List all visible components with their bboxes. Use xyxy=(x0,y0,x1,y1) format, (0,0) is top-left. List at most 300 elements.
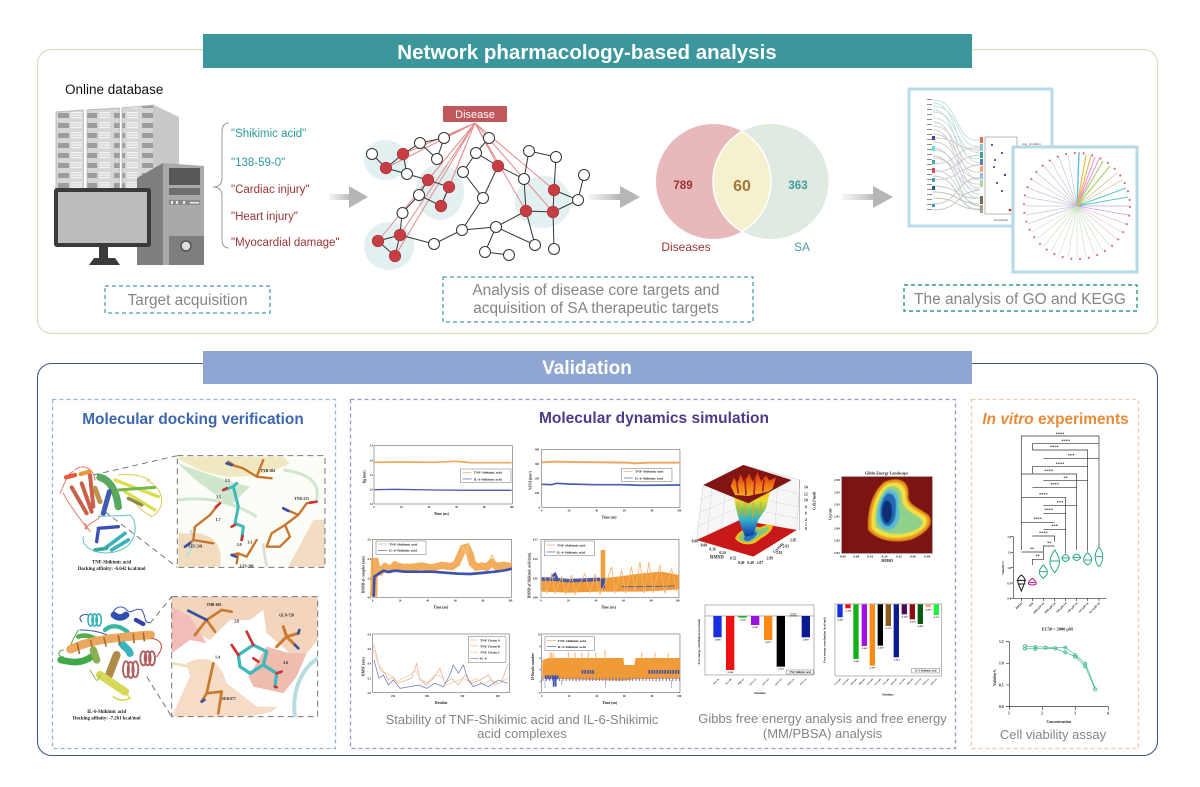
chart: viability violin plot with significance brackets: **** xyxy=(1050,482,1059,487)
chart: IL-6 free energy bars: -0.405 xyxy=(837,618,844,621)
inset: TNF docking close-up: TYR-304 xyxy=(261,469,275,473)
chart: viability violin plot with significance brackets: ** xyxy=(1047,541,1051,546)
chart: RMSD of Shikimic acid: 80 xyxy=(650,599,653,602)
heading: molecular docking: Molecular docking verification xyxy=(82,411,304,428)
caption: Gibbs and MM/PBSA xyxy=(698,711,947,741)
chart: RMSD of complex: RMSD of complex (nm) xyxy=(361,555,365,593)
chart: RMSD of complex: TNF-Shikimic acid xyxy=(389,542,417,546)
chart: RMSF by residue: 400 xyxy=(496,695,500,698)
chart: SASA over time: 0 xyxy=(541,509,543,512)
chart: viability violin plot with significance brackets: 500 μM SA xyxy=(1055,601,1068,614)
chart: Rg over time xyxy=(362,445,514,516)
chart: 3D Gibbs free energy surface: 2.91 xyxy=(776,551,783,555)
chart: cell viability dose curve: 3 xyxy=(1074,711,1076,715)
label: disease: Disease xyxy=(455,109,495,121)
chart: TNF free energy bars: GLY-123 xyxy=(774,677,783,686)
chart: Rg over time: Time (ns) xyxy=(434,512,450,516)
caption: IL-6 docking affinity xyxy=(73,710,141,721)
chart: 3D Gibbs free energy surface: Gyrate xyxy=(772,541,785,554)
chart: RMSF by residue: RMSF (nm) xyxy=(361,657,365,676)
chart: IL-6 free energy bars: ARG-722 xyxy=(930,678,938,686)
chart: IL-6 free energy bars: GLY-600 xyxy=(834,679,842,686)
chart: RMSF by residue: TNF Chain C xyxy=(480,651,501,655)
chart: 3D Gibbs free energy surface: 2.95 xyxy=(790,539,797,543)
chart: 3D Gibbs free energy surface: 10 xyxy=(804,499,808,503)
chart: RMSD of complex: 20 xyxy=(399,599,402,602)
chart: Gibbs energy landscape: Gyrate xyxy=(828,508,833,520)
chart: 3D Gibbs free energy surface: RMSD xyxy=(710,556,724,561)
chart: RMSF by residue: IL-6 xyxy=(480,657,487,661)
chart: RMSF by residue: 250 xyxy=(391,695,396,698)
chart: viability violin plot with significance brackets xyxy=(1001,431,1107,631)
chart: H-bonds number: 6 xyxy=(539,657,541,660)
chart: 3D Gibbs free energy surface: 4 xyxy=(805,518,807,522)
chart: Rg over time: TNF-Shikimic acid xyxy=(474,471,502,475)
inset: TNF docking close-up: TYR-233 xyxy=(294,497,309,501)
chart: viability violin plot with significance brackets: ** xyxy=(1063,475,1068,480)
chart: IL-6 free energy bars xyxy=(822,604,942,696)
chart: 3D Gibbs free energy surface: 2.93 xyxy=(783,544,789,548)
chart: H-bonds number: 0 xyxy=(541,695,543,698)
chart: viability violin plot with significance brackets: *** xyxy=(1051,524,1058,529)
chart: IL-6 free energy bars: ASN-679 xyxy=(906,678,914,686)
chart: SASA over time: 20 xyxy=(568,509,571,512)
network diagram xyxy=(364,106,590,270)
chart: SASA over time: Time (ns) xyxy=(602,515,617,519)
chart: TNF free energy bars: -2.167 xyxy=(777,668,785,671)
chart: IL-6 free energy bars: SER-602 xyxy=(851,679,858,686)
chart: RMSD of complex xyxy=(361,539,513,610)
chart: viability violin plot with significance brackets: 0.5 xyxy=(1007,581,1012,585)
chart: viability violin plot with significance brackets: 1.0 xyxy=(1007,566,1012,570)
chart: cell viability dose curve: 2 xyxy=(1041,711,1043,715)
chart: viability violin plot with significance brackets: 62.5 μM SA xyxy=(1088,601,1102,614)
heading: network pharmacology-based analysis xyxy=(203,34,972,68)
chart: cell viability dose curve: 1.5 xyxy=(999,640,1004,644)
chart: TNF free energy bars: -0.367 xyxy=(752,626,759,629)
search terms list xyxy=(231,128,340,249)
chart: RMSF by residue: 300 xyxy=(425,695,430,698)
heading: molecular dynamics: Molecular dynamics simulation xyxy=(539,410,769,427)
chart: TNF free energy bars xyxy=(697,605,814,695)
search terms list: "Cardiac injury" xyxy=(231,184,309,196)
chart: H-bonds number: H-Bonds number xyxy=(531,652,535,680)
chart: RMSD of complex: 0.2 xyxy=(368,577,372,580)
chart: TNF free energy bars: LEU-122 xyxy=(762,677,771,686)
chart: H-bonds number: IL-6-Shikimic acid xyxy=(558,645,586,649)
chart: IL-6 free energy bars: TYR-721 xyxy=(923,679,930,686)
brace xyxy=(213,123,229,248)
chart: IL-6 free energy bars: -0.375 xyxy=(933,616,940,619)
arrow: to network xyxy=(329,186,368,208)
chart: viability violin plot with significance brackets: H/R xyxy=(1028,601,1035,608)
chart: cell viability dose curve: 1.0 xyxy=(999,662,1004,666)
chart: SASA over time: IL-6-Shikimic acid xyxy=(635,476,663,480)
heading: validation: Validation xyxy=(542,358,632,379)
chart: viability violin plot with significance brackets: **** xyxy=(1039,492,1048,497)
chart: Gibbs energy landscape: 0.24 xyxy=(882,554,888,558)
venn diagram: SA xyxy=(794,240,810,254)
caption: stability of complexes xyxy=(386,712,659,741)
caption: stability of complexes: acid complexes xyxy=(477,726,567,741)
chart: viability violin plot with significance brackets: **** xyxy=(1061,438,1070,443)
chart: RMSF by residue: TNF Chain A xyxy=(480,638,500,642)
chart: viability violin plot with significance brackets: 1.5 xyxy=(1007,551,1012,555)
chart: SASA over time: 100 xyxy=(677,509,682,512)
inset: IL-6 docking close-up xyxy=(172,597,318,717)
arrow: to venn diagram xyxy=(588,186,640,208)
chart: Gibbs energy landscape: 2.93 xyxy=(834,502,840,506)
chart: TNF free energy bars: LEU-121 xyxy=(749,677,758,686)
chart: sankey and bubble plot: Avg_LFoldExt xyxy=(1022,142,1041,146)
chart: Gibbs energy landscape: 2.95 xyxy=(834,490,840,494)
chart: 3D Gibbs free energy surface: 0.24 xyxy=(719,551,726,555)
chart: Gibbs energy landscape: 0.16 xyxy=(867,554,873,558)
connector lines: inset 2 xyxy=(147,597,172,717)
chart: cell viability dose curve xyxy=(993,640,1109,724)
caption: TNF docking affinity: TNF-Shikimic acid xyxy=(92,561,132,566)
chart: TNF free energy bars: 0.021 xyxy=(791,612,797,615)
chart: 3D Gibbs free energy surface: 6 xyxy=(805,512,807,516)
callout: target acquisition: Target acquisition xyxy=(128,292,247,309)
chart: 3D Gibbs free energy surface: 2 xyxy=(805,522,807,526)
chart: viability violin plot with significance brackets: **** xyxy=(1056,461,1064,466)
caption: IL-6 docking affinity: Docking affinity: -7.261 kcal/mol xyxy=(73,716,141,721)
chart: IL-6 free energy bars: ALA-601 xyxy=(842,678,850,686)
search terms list: "Heart injury" xyxy=(231,211,298,223)
chart: H-bonds number: 60 xyxy=(623,695,626,698)
chart: viability violin plot with significance brackets: DMSO xyxy=(1015,601,1024,610)
inset: TNF docking close-up: 3.0 xyxy=(237,542,242,547)
chart: Rg over time: 1.5 xyxy=(370,503,374,506)
chart: TNF free energy bars: Free energy contribution (kcal/mol) xyxy=(697,619,701,664)
caption: TNF docking affinity xyxy=(78,561,146,572)
chart: cell viability dose curve: 0.0 xyxy=(999,705,1004,709)
chart: Rg over time: 20 xyxy=(400,506,403,509)
chart: 3D Gibbs free energy surface xyxy=(692,465,816,565)
chart: viability violin plot with significance brackets: *** xyxy=(1057,500,1063,505)
inset: TNF docking close-up: LEU-241 xyxy=(188,545,203,549)
chart: H-bonds number xyxy=(531,633,682,705)
chart: viability violin plot with significance brackets: 2.0 xyxy=(1007,535,1012,539)
inset: TNF docking close-up: 3.5 xyxy=(216,494,221,499)
chart: SASA over time: 100 xyxy=(535,492,540,495)
chart: RMSD of complex: 100 xyxy=(508,599,513,602)
chart: H-bonds number: 10 xyxy=(538,633,541,636)
chart: cell viability dose curve: 4 xyxy=(1107,711,1109,715)
inset: TNF docking close-up xyxy=(177,456,325,568)
chart: viability violin plot with significance brackets: **** xyxy=(1050,445,1059,450)
heading: network pharmacology-based analysis: Network pharmacology-based analysis xyxy=(397,41,777,64)
chart: Gibbs energy landscape: 0.40 xyxy=(910,554,916,558)
inset: IL-6 docking close-up: 1.4 xyxy=(215,654,220,659)
chart: RMSF by residue: 0.4 xyxy=(368,663,372,666)
callout: target acquisition xyxy=(105,286,270,313)
panel: molecular docking verification xyxy=(52,400,336,748)
protein: IL-6 ribbon xyxy=(59,607,161,700)
chart: RMSD of complex: 60 xyxy=(454,599,457,602)
chart: Rg over time: 80 xyxy=(483,506,486,509)
chart: viability violin plot with significance brackets: EC50 > 2000 μM xyxy=(1042,626,1073,631)
panel: in vitro experiments xyxy=(972,400,1138,748)
label: online database: Online database xyxy=(65,82,163,97)
callout: GO and KEGG: The analysis of GO and KEGG xyxy=(914,291,1126,308)
chart: Gibbs energy landscape: 0.00 xyxy=(840,554,846,558)
chart: Gibbs energy landscape: 2.91 xyxy=(834,514,840,518)
chart: IL-6 free energy bars: Free energy contribution (kcal/mol) xyxy=(822,617,826,663)
chart: IL-6 free energy bars: -0.518 xyxy=(909,620,916,623)
panel: molecular dynamics simulation xyxy=(350,400,956,748)
chart: RMSD of complex: 0.0 xyxy=(368,596,372,599)
chart: viability violin plot with significance brackets: **** xyxy=(1044,508,1053,513)
chart: TNF free energy bars: -2.308 xyxy=(727,671,734,674)
chart: viability violin plot with significance brackets: 2000 μM SA xyxy=(1032,601,1046,615)
chart: RMSD of complex: 40 xyxy=(426,599,430,602)
chart: IL-6 free energy bars: LEU-604 xyxy=(867,678,875,686)
chart: RMSD of Shikimic acid: 0.10 xyxy=(533,558,538,561)
chart: H-bonds number: Time (ns) xyxy=(602,701,618,705)
chart: SASA over time: 300 xyxy=(535,463,540,466)
venn diagram: 789 xyxy=(673,180,693,192)
chart: Rg over time: 40 xyxy=(428,506,431,509)
chart: SASA over time: 80 xyxy=(651,509,654,512)
chart: cell viability dose curve: 0.5 xyxy=(999,683,1004,687)
chart: SASA over time: 400 xyxy=(535,449,540,452)
chart: 3D Gibbs free energy surface: 0.16 xyxy=(709,548,716,552)
chart: Rg over time: IL-6-Shikimic acid xyxy=(474,477,502,481)
inset: IL-6 docking close-up: 2.6 xyxy=(283,660,288,665)
callout: disease core targets: acquisition of SA therapeutic targets xyxy=(473,300,719,317)
chart: 3D Gibbs free energy surface: 0.48 xyxy=(747,561,754,565)
chart: RMSD of complex: 0.4 xyxy=(368,558,372,561)
chart: RMSD of Shikimic acid: TNF-Shikimic acid xyxy=(557,543,585,547)
chart: IL-6 free energy bars: -1.423 xyxy=(861,647,868,650)
chart: RMSF by residue: 0.8 xyxy=(368,633,372,636)
chart: IL-6 free energy bars: -2.077 xyxy=(869,667,876,670)
chart: RMSF by residue: 0.2 xyxy=(368,677,372,680)
label: disease xyxy=(443,106,507,122)
chart: RMSF by residue: 0.6 xyxy=(368,648,372,651)
chart: 3D Gibbs free energy surface: 0.08 xyxy=(701,544,707,548)
chart: Gibbs energy landscape: 0.08 xyxy=(853,554,859,558)
chart: viability violin plot with significance brackets: **** xyxy=(1044,468,1053,473)
chart: TNF free energy bars: TYR-151 xyxy=(787,677,796,687)
chart: SASA over time: 60 xyxy=(623,509,626,512)
chart: H-bonds number: 2 xyxy=(539,680,541,683)
chart: viability violin plot with significance brackets: 125 μM SA xyxy=(1077,601,1090,614)
chart: IL-6 free energy bars: SER-677 xyxy=(891,678,899,686)
chart: viability violin plot with significance brackets: 0.0 xyxy=(1007,597,1012,601)
chart: 3D Gibbs free energy surface: 12 xyxy=(804,492,808,496)
chart: H-bonds number: 4 xyxy=(539,669,541,672)
chart: H-bonds number: 100 xyxy=(677,695,682,698)
search terms list: "Myocardial damage" xyxy=(231,237,340,249)
chart: Gibbs energy landscape: RMSD xyxy=(881,558,893,563)
callout: disease core targets: Analysis of disease core targets and xyxy=(472,282,720,299)
chart: RMSD of complex: IL-6-Shikimic acid xyxy=(389,549,417,553)
venn diagram: 363 xyxy=(788,180,808,192)
inset: TNF docking close-up: LYS-209 xyxy=(240,564,254,568)
chart: 3D Gibbs free energy surface: 2.89 xyxy=(767,556,773,560)
chart: TNF free energy bars: ILE-58 xyxy=(713,677,721,685)
chart: circular chord plot xyxy=(1013,147,1137,272)
chart: TNF free energy bars: TNF-Shikimic acid xyxy=(789,671,811,674)
chart: IL-6 free energy bars: GLN-720 xyxy=(915,679,922,686)
chart: Gibbs energy landscape: 2.85 xyxy=(834,539,840,543)
inset: IL-6 docking close-up: SER-677 xyxy=(222,697,236,701)
chart: viability violin plot with significance brackets: **** xyxy=(1039,531,1048,536)
chart: SASA over time: TNF-Shikimic acid xyxy=(635,470,663,474)
chart: RMSD of Shikimic acid xyxy=(527,539,680,610)
chart: Rg over time: 3.4 xyxy=(370,445,374,448)
protein: TNF ribbon xyxy=(60,467,162,553)
chart: IL-6 free energy bars: -0.160 xyxy=(845,609,852,612)
chart: Rg over time: 2.5 xyxy=(370,474,374,477)
chart: Rg over time: 60 xyxy=(455,506,459,509)
chart: IL-6 free energy bars: VAL-606 xyxy=(882,677,891,686)
chart: RMSF by residue xyxy=(361,633,509,705)
chart: TNF free energy bars: -0.897 xyxy=(802,638,810,641)
chart: Gibbs energy landscape: 2.83 xyxy=(834,551,840,555)
heading: in vitro experiments: In vitro experiments xyxy=(982,411,1129,428)
chart: 3D Gibbs free energy surface: 0.00 xyxy=(692,540,698,544)
caption: cell viability assay: Cell viability assay xyxy=(1000,727,1107,742)
venn diagram: Diseases xyxy=(661,240,711,254)
chart: IL-6 free energy bars: -0.685 xyxy=(917,625,924,628)
chart: RMSD of Shikimic acid: 60 xyxy=(622,599,626,602)
panel: validation xyxy=(38,351,1158,756)
chart: Gibbs energy landscape: 2.99 xyxy=(834,478,840,482)
arrow: to GO and KEGG xyxy=(842,186,893,208)
inset: TNF docking close-up: 2.5 xyxy=(225,478,230,483)
chart: IL-6 free energy bars: Residue xyxy=(882,692,894,696)
chart: 3D Gibbs free energy surface: 0 xyxy=(805,527,807,531)
caption: Gibbs and MM/PBSA: (MM/PBSA) analysis xyxy=(763,726,883,741)
chart: Gibbs energy landscape: 0.48 xyxy=(924,554,930,558)
chart: RMSD of Shikimic acid: 0.05 xyxy=(533,577,538,580)
chart: 3D Gibbs free energy surface: 0.32 xyxy=(730,556,737,560)
chart: IL-6 free energy bars: -0.095 xyxy=(925,608,932,611)
chart: IL-6 free energy bars: IL-6-Shikimic acid xyxy=(915,670,937,673)
callout: GO and KEGG xyxy=(904,285,1137,311)
chart: RMSD of Shikimic acid: 0.00 xyxy=(533,596,538,599)
chart: Rg over time: 100 xyxy=(510,506,514,509)
chart: cell viability dose curve: 1 xyxy=(1008,711,1010,715)
chart: viability violin plot with significance brackets: ** xyxy=(1035,554,1040,559)
chart: IL-6 free energy bars: -0.328 xyxy=(901,615,908,618)
chart: TNF free energy bars: ILE-155 xyxy=(799,677,808,686)
heading: validation xyxy=(203,351,972,384)
chart: IL-6 free energy bars: -1.824 xyxy=(893,658,900,661)
chart: Rg over time: 2.0 xyxy=(370,489,374,492)
chart: RMSD of Shikimic acid: 100 xyxy=(676,599,680,602)
chart: SASA over time: 40 xyxy=(595,509,599,512)
caption: IL-6 docking affinity: IL-6-Shikimic acid xyxy=(87,710,126,715)
chart: viability violin plot with significance brackets: ** xyxy=(1030,546,1034,551)
chart: IL-6 free energy bars: THR-603 xyxy=(859,679,866,686)
connector lines: inset 1 xyxy=(93,456,177,567)
chart: Rg over time: 3.0 xyxy=(370,459,374,462)
chart: viability violin plot with significance brackets: Viability% xyxy=(1001,561,1005,575)
chart: 3D Gibbs free energy surface: 14 xyxy=(804,486,808,490)
chart: RMSD of complex: 0 xyxy=(372,599,374,602)
chart: H-bonds number: TNF-Shikimic acid xyxy=(558,639,586,643)
chart: SASA over time xyxy=(529,449,682,519)
chart: viability violin plot with significance brackets: 250 μM SA xyxy=(1066,601,1079,614)
chart: viability violin plot with significance brackets: 1000 μM SA xyxy=(1043,601,1057,615)
chart: RMSD of complex: Time (ns) xyxy=(433,606,449,610)
chart: RMSF by residue: 0.0 xyxy=(368,692,372,695)
chart: IL-6 free energy bars: ILE-678 xyxy=(899,679,906,685)
search terms list: "Shikimic acid" xyxy=(231,128,306,140)
chart: RMSF by residue: TNF Chain B xyxy=(480,644,501,648)
caption: stability of complexes: Stability of TNF-Shikimic acid and IL-6-Shikimic xyxy=(386,712,659,727)
chart: RMSD of Shikimic acid: 0 xyxy=(540,599,542,602)
chart: H-bonds number: 0 xyxy=(539,692,541,695)
chart: cell viability dose curve: Viability% xyxy=(993,668,997,686)
chart: RMSF by residue: Residue xyxy=(435,701,448,705)
chart: TNF free energy bars: PHE-61 xyxy=(737,677,746,686)
chart: Gibbs energy landscape: Gibbs Energy Landscape xyxy=(865,471,908,476)
inset: IL-6 docking close-up: GLN-720 xyxy=(279,614,294,618)
inset: IL-6 docking close-up: THR-603 xyxy=(207,603,221,607)
chart: 3D Gibbs free energy surface: 0.40 xyxy=(738,561,745,565)
inset: TNF docking close-up: 1.7 xyxy=(216,517,221,522)
chart: IL-6 free energy bars: GLU-605 xyxy=(875,679,882,686)
search terms list: "138-59-0" xyxy=(231,157,285,169)
chart: TNF free energy bars: ALA-60 xyxy=(725,677,733,686)
chart: IL-6 free energy bars: -1.419 xyxy=(877,647,884,650)
chart: RMSD of Shikimic acid: IL-6-Shikimic acid xyxy=(557,550,585,554)
chart: RMSD of Shikimic acid: 20 xyxy=(567,599,570,602)
chart: Gibbs energy landscape: 0.32 xyxy=(896,554,902,558)
chart: TNF free energy bars: Residue xyxy=(754,691,766,695)
chart: TNF free energy bars: -0.977 xyxy=(765,641,772,644)
inset: IL-6 docking close-up: 2.8 xyxy=(234,619,239,624)
chart: TNF free energy bars: -0.895 xyxy=(714,638,722,641)
chart: H-bonds number: 80 xyxy=(651,695,654,698)
chart: cell viability dose curve: Concentration xyxy=(1046,719,1072,724)
icon: server racks and computer xyxy=(54,105,204,265)
chart: Gibbs energy landscape xyxy=(828,471,932,563)
chart: Gibbs energy landscape: 2.89 xyxy=(834,526,840,530)
chart: RMSD of Shikimic acid: RMSD of Shikimic acid (nm) xyxy=(527,552,531,598)
chart: Rg over time: Rg (nm) xyxy=(362,470,366,483)
chart: H-bonds number: 40 xyxy=(595,695,599,698)
venn diagram xyxy=(656,124,828,254)
chart: Rg over time: 0 xyxy=(373,506,375,509)
chart: sankey and bubble plot xyxy=(909,89,1052,226)
chart: viability violin plot with significance brackets: **** xyxy=(1033,517,1042,522)
chart: 3D Gibbs free energy surface: G (kJ/mol) xyxy=(811,491,816,510)
chart: RMSD of Shikimic acid: Time (ns) xyxy=(601,606,617,610)
chart: TNF free energy bars: -0.047 xyxy=(739,619,747,622)
chart: IL-6 free energy bars: -0.753 xyxy=(885,627,892,630)
panel: network pharmacology-based analysis xyxy=(38,34,1158,334)
chart: viability violin plot with significance brackets: *** xyxy=(1068,453,1074,458)
caption: Gibbs and MM/PBSA: Gibbs free energy analysis and free energy xyxy=(698,711,947,726)
chart: SASA over time: SASA (nm²) xyxy=(529,471,533,490)
chart: RMSD of Shikimic acid: 40 xyxy=(595,599,598,602)
chart: 3D Gibbs free energy surface: 8 xyxy=(805,505,807,509)
chart: H-bonds number: 20 xyxy=(568,695,571,698)
chart: RMSD of complex: 80 xyxy=(482,599,485,602)
chart: IL-6 free energy bars: -1.961 xyxy=(853,660,860,663)
caption: TNF docking affinity: Docking affinity: -6.642 kcal/mol xyxy=(78,567,146,572)
chart: SASA over time: 0 xyxy=(539,506,541,509)
chart: RMSF by residue: 350 xyxy=(460,695,465,698)
chart: RMSD of complex: 0.6 xyxy=(368,539,372,542)
